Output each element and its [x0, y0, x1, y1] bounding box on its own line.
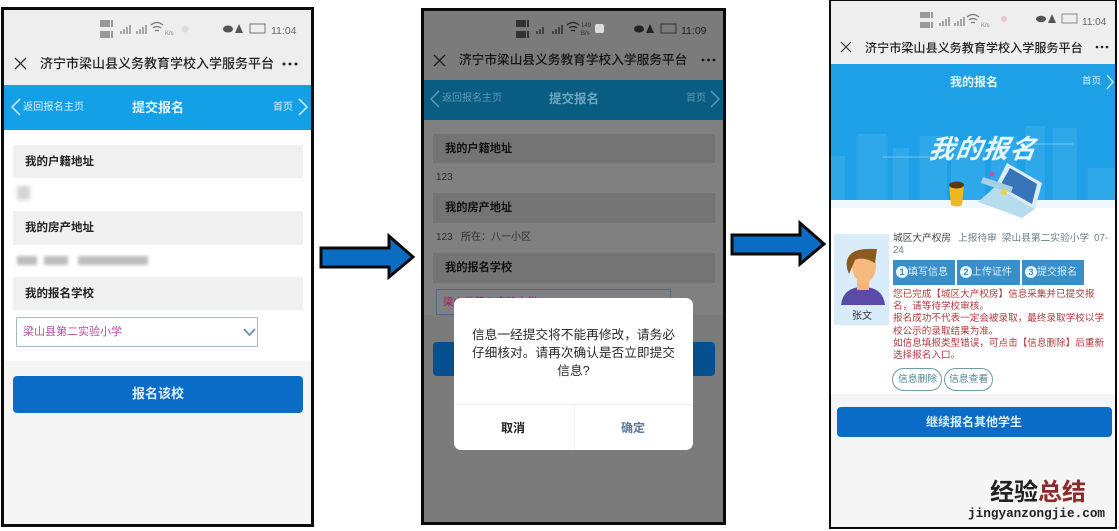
step 1 number: 1: [899, 267, 904, 277]
red status notice: 报名成功不代表一定会被录取，最终录取学校以学校公示的录取结果为准。: [893, 313, 1104, 337]
phone 2 dimmed background: [424, 11, 723, 522]
dialog cancel button: 取消: [501, 421, 525, 435]
watermark url: jingyanzongjie.com: [968, 506, 1105, 521]
phone 1 back label: 返回报名主页: [23, 102, 84, 113]
phone 1 status bar icons: [100, 20, 297, 38]
phone 1 more menu dots: [282, 62, 298, 66]
phone 1 white form panel: [4, 130, 311, 361]
phone 1 light background: [4, 10, 311, 524]
phone screen 2: confirmation dialog: [421, 8, 726, 525]
selected school name: 梁山县第二实验小学: [443, 296, 538, 308]
step 3 number: 3: [1028, 267, 1034, 277]
phone 1 submit label: 报名该校: [132, 386, 184, 401]
phone 2 status bar icons: B/s: [581, 31, 590, 37]
phone 1 forward chevron: [298, 98, 308, 116]
phone 2 forward chevron: [710, 90, 720, 108]
phone 2 more menu dots: [702, 58, 716, 62]
section: household address: [433, 134, 715, 163]
step 1 number: [896, 266, 908, 278]
phone 2 dimmed header bar: [424, 80, 723, 120]
section label: property address: 我的房产地址: [25, 222, 94, 234]
registration summary line: 城区大产权房 上报待审 梁山县第二实验小学 07-: [893, 233, 1108, 244]
school dropdown: [16, 317, 258, 347]
step 3 tab: [1022, 260, 1084, 285]
step 1 tab: [893, 260, 955, 285]
section label: chosen school: 我的报名学校: [445, 262, 512, 274]
selected school name: 梁山县第二实验小学: [23, 326, 122, 338]
step 1 label: 填写信息: [908, 267, 948, 278]
phone screen 1: submit registration form: [1, 7, 314, 527]
phone 2 status bar icons: [516, 20, 707, 38]
section label: chosen school: 我的报名学校: [25, 288, 94, 300]
section label: property address: 我的房产地址: [445, 202, 512, 214]
student name: 张文: [852, 311, 872, 322]
phone 1 header title: 提交报名: [132, 100, 184, 115]
dialog confirm button: 确定: [621, 421, 645, 435]
watermark: [968, 479, 1105, 521]
phone 1 page title: 济宁市梁山县义务教育学校入学服务平台: [40, 56, 274, 71]
step 3 label: 提交报名: [1037, 267, 1077, 278]
step 2 number: [960, 266, 972, 278]
section: property address: [433, 193, 715, 223]
phone 1 back chevron: [11, 98, 20, 116]
section: chosen school: [13, 277, 303, 310]
view info button: [944, 368, 993, 391]
phone 3 page title: 济宁市梁山县义务教育学校入学服务平台: [865, 41, 1083, 55]
phone 2 close icon: [434, 54, 446, 66]
arrow: step 1 to step 2: [320, 232, 416, 280]
phone 2 form panel: [424, 120, 723, 315]
phone 3 white info panel: [831, 200, 1115, 394]
phone 1 home label: 首页: [273, 102, 293, 113]
arrow: step 2 to step 3: [730, 220, 826, 268]
delete info button: [892, 368, 942, 391]
phone 1 top browser bar: [4, 10, 311, 85]
phone 1 close icon: [14, 58, 26, 70]
phone 2 back label: 返回报名主页: [442, 93, 502, 104]
phone 3 close icon: [840, 42, 852, 52]
phone 2 page title: 济宁市梁山县义务教育学校入学服务平台: [459, 53, 687, 67]
school dropdown behind dialog: [436, 289, 671, 315]
delete info label: 信息删除: [898, 374, 937, 385]
dialog message: 信息一经提交将不能再修改，请务必仔细核对。请再次确认是否立即提交信息?: [472, 328, 675, 378]
phone 1 status bar icons: K/s: [165, 31, 174, 37]
red status notice: 您已完成【城区大产权房】信息采集并已提交报名，请等待学校审核。: [893, 289, 1094, 312]
phone 3 blue banner: [831, 64, 1115, 200]
registration summary line: 24: [893, 245, 904, 256]
phone 2 back chevron: [430, 90, 440, 108]
phone 2 header title: 提交报名: [549, 92, 599, 106]
phone 3 more menu dots: [1096, 46, 1108, 48]
view info label: 信息查看: [949, 374, 988, 385]
laptop: [978, 163, 1042, 218]
dialog horizontal separator: [454, 404, 693, 405]
avatar illustration: [841, 248, 885, 305]
phone 3 status bar icons: K/s: [981, 23, 990, 29]
section: property address: [13, 211, 303, 245]
phone 3 light background: [831, 1, 1115, 527]
section label: household address: 我的户籍地址: [25, 156, 94, 168]
phone 2 home label: 首页: [686, 93, 706, 104]
phone 1 blue header bar: [4, 85, 311, 130]
dialog vertical separator: [574, 404, 575, 450]
phone 2 status bar icons: 11:09: [681, 25, 707, 37]
confirmation dialog: [454, 298, 693, 450]
section label: household address: 我的户籍地址: [445, 143, 512, 155]
continue registering button: [837, 407, 1112, 437]
phone 1 status bar icons: 11:04: [271, 25, 297, 37]
phone 2 status bar icons: 149: [581, 23, 592, 29]
phone 3 banner illustration: skyline, cup, laptop: [831, 126, 1115, 218]
registration summary line: [893, 232, 1108, 256]
dropdown chevron: [243, 328, 256, 336]
step 2 number: 2: [963, 267, 968, 277]
watermark chinese text: 经验总结: [990, 479, 1086, 506]
property address value: 123 所在：八一小区: [436, 232, 531, 243]
cup: [949, 182, 964, 206]
blurred household address value: [17, 186, 30, 200]
step 2 tab: [957, 260, 1020, 285]
household address value: 123: [436, 172, 453, 183]
student avatar card: [834, 234, 889, 325]
phone 3 home label: 首页: [1082, 76, 1101, 87]
phone 3 top browser bar: [831, 1, 1115, 64]
phone 1 submit button: [13, 376, 303, 413]
red status notice: [893, 288, 1104, 361]
section: household address: [13, 145, 303, 178]
phone screen 3: my registration result: [829, 0, 1117, 529]
step 3 number: [1025, 266, 1037, 278]
phone 3 header title: 我的报名: [950, 75, 998, 89]
blurred property address value: [15, 254, 150, 267]
banner title artwork: 我的报名: [927, 134, 1039, 164]
continue registering label: 继续报名其他学生: [926, 415, 1022, 429]
section: chosen school: [433, 253, 715, 283]
step 2 label: 上传证件: [972, 267, 1012, 278]
red status notice: 如信息填报类型错误，可点击【信息删除】后重新选择报名入口。: [893, 338, 1104, 361]
phone 2 submit button behind dialog: [433, 342, 715, 376]
phone 3 forward chevron: [1106, 74, 1114, 90]
phone 3 status bar icons: [920, 12, 1107, 29]
phone 3 status bar icons: 11:04: [1082, 17, 1107, 28]
